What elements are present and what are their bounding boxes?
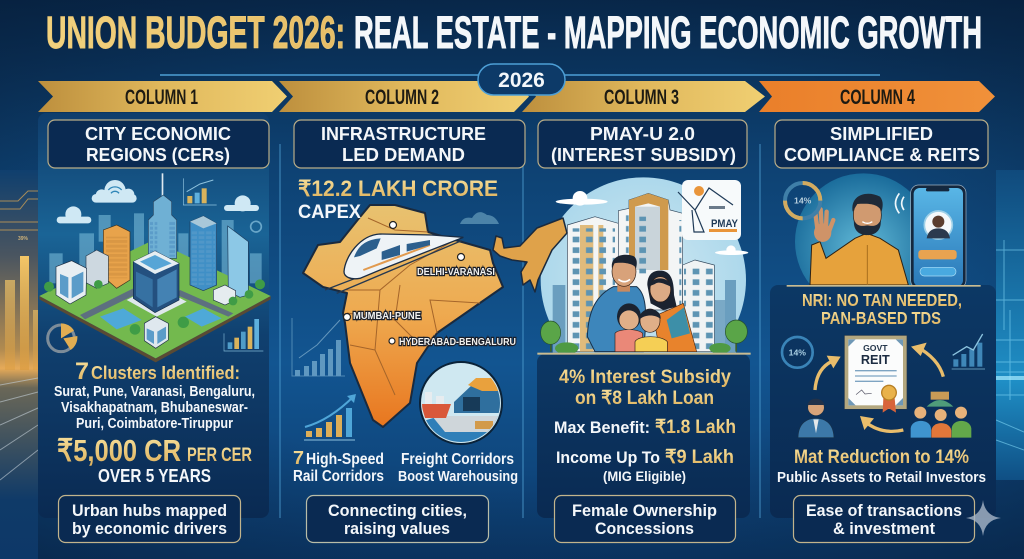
column banner 2: COLUMN 2 <box>365 86 439 109</box>
capex figure: ₹12.2 LAKH CRORE <box>298 176 498 201</box>
column banner 2 <box>279 81 529 112</box>
arrow heads <box>827 343 927 430</box>
illustration: bullet train <box>325 234 463 293</box>
corridor captions: Boost Warehousing <box>398 468 518 485</box>
heading: infrastructure led demand <box>294 120 525 168</box>
takeaway box 4: & investment <box>833 520 935 538</box>
ring 14 percent top <box>785 183 820 218</box>
center apartment <box>618 193 683 310</box>
NRI heading: NRI: NO TAN NEEDED, <box>802 290 962 310</box>
illustration: NRI man with phone <box>783 173 981 287</box>
investor <box>798 399 834 438</box>
year badge <box>478 64 565 95</box>
heading: city economic regions: REGIONS (CERs) <box>86 145 230 165</box>
REIT caption <box>777 446 986 486</box>
NRI heading: PAN-BASED TDS <box>821 308 941 328</box>
growth chart icon <box>304 394 356 440</box>
children <box>615 303 667 352</box>
icon: PMAY logo <box>678 180 741 240</box>
left apartment <box>567 217 618 352</box>
heading: city economic regions: CITY ECONOMIC <box>85 124 231 144</box>
illustration: family and housing <box>537 177 751 355</box>
REIT caption: Public Assets to Retail Investors <box>777 469 986 486</box>
subsidy details: Max Benefit: <box>554 418 650 437</box>
lower building <box>144 317 168 348</box>
takeaway box 3: Female Ownership <box>572 502 717 520</box>
takeaway box 4: Ease of transactions <box>806 502 962 520</box>
column banner 4: COLUMN 4 <box>840 86 915 109</box>
small building <box>86 250 108 288</box>
certificate <box>844 335 907 413</box>
heading: pmay-u: (INTEREST SUBSIDY) <box>551 145 736 165</box>
takeaway box 1: Urban hubs mapped <box>72 502 227 520</box>
subsidy details <box>554 367 736 484</box>
heading: infrastructure led demand: INFRASTRUCTURE <box>321 124 486 144</box>
icon: freight warehouse <box>420 362 505 445</box>
trees <box>541 320 747 354</box>
illustration: isometric city <box>39 173 271 362</box>
clusters text: Surat, Pune, Varanasi, Bengaluru, <box>54 384 255 400</box>
title <box>46 7 982 58</box>
panel: column 2 <box>292 120 525 542</box>
cloud icons <box>57 180 259 223</box>
clouds <box>556 191 748 255</box>
map labels <box>344 222 516 348</box>
heading: pmay-u <box>538 120 747 168</box>
clusters text: Visakhapatnam, Bhubaneswar- <box>61 400 248 416</box>
clusters text: Puri, Coimbatore-Tiruppur <box>76 416 233 432</box>
title: UNION BUDGET 2026: <box>46 7 345 58</box>
certificate: GOVT <box>863 343 888 353</box>
divider lines <box>280 144 760 518</box>
takeaway box 2: Connecting cities, <box>328 502 467 520</box>
map labels: DELHI-VARANASI <box>417 267 495 278</box>
column banner 1: COLUMN 1 <box>125 86 198 109</box>
right apartment <box>683 260 714 352</box>
corridor captions: Freight Corridors <box>401 451 514 468</box>
column banner 3 <box>522 81 765 112</box>
takeaway box 2: raising values <box>344 520 450 538</box>
clusters text: 7 <box>75 358 89 385</box>
retail group <box>911 392 971 438</box>
takeaway box 1 <box>58 496 240 542</box>
subsidy details: on ₹8 Lakh Loan <box>575 388 714 409</box>
subsidy details: Income Up To <box>556 448 660 467</box>
orange tower <box>103 225 130 288</box>
column banner 4 <box>759 81 995 112</box>
faded growth chart <box>292 318 345 376</box>
panel: column 4 <box>770 120 996 542</box>
white building <box>56 261 87 304</box>
man <box>810 194 908 285</box>
heading: simplified compliance <box>775 120 988 168</box>
cycle arrows <box>815 347 943 431</box>
column banner 3: COLUMN 3 <box>604 86 679 109</box>
panel: column 1 <box>38 113 271 542</box>
takeaway box 3: Concessions <box>595 520 694 538</box>
subsidy details: ₹1.8 Lakh <box>655 417 736 438</box>
panel: column 3 <box>493 120 751 542</box>
capex figure: CAPEX <box>298 202 361 223</box>
icon: PMAY logo: PMAY <box>711 218 739 230</box>
spire tower <box>148 173 177 258</box>
mother <box>647 271 697 352</box>
heading: infrastructure led demand: LED DEMAND <box>342 145 465 165</box>
corridor captions: 7 <box>293 448 304 468</box>
father <box>587 255 646 352</box>
corridor captions <box>293 448 518 485</box>
certificate: REIT <box>861 353 890 367</box>
capex figure <box>298 176 498 223</box>
bar chart icon bottom <box>224 319 263 351</box>
map: India with corridors <box>303 205 503 427</box>
ground line <box>787 285 981 287</box>
bar chart icon top <box>183 178 217 205</box>
takeaway box 4 <box>794 496 974 542</box>
funding figure <box>57 433 252 486</box>
central building <box>127 251 187 317</box>
icon: sparkle <box>966 500 1001 536</box>
ring 14 percent: 14% <box>789 348 806 358</box>
takeaway box 3 <box>554 496 736 542</box>
heading: city economic regions <box>48 120 269 168</box>
map labels: HYDERABAD-BENGALURU <box>399 337 516 348</box>
heading: pmay-u: PMAY-U 2.0 <box>590 124 695 144</box>
subsidy details: ₹9 Lakh <box>665 447 734 468</box>
ground line <box>537 353 751 355</box>
REIT diagram <box>782 334 985 438</box>
corridor captions: Rail Corridors <box>293 468 384 485</box>
heading: simplified compliance: COMPLIANCE & REITS <box>784 145 980 165</box>
clusters text <box>54 358 255 432</box>
signal arcs <box>895 193 904 213</box>
glass tower <box>228 226 248 297</box>
clusters text: Clusters Identified: <box>91 363 240 383</box>
REIT caption: Mat Reduction to 14% <box>794 446 969 468</box>
corridor captions: High-Speed <box>306 451 384 468</box>
subsidy details: (MIG Eligible) <box>603 469 686 484</box>
year badge: 2026 <box>498 69 545 92</box>
ring 14 percent top: 14% <box>794 196 812 206</box>
phone <box>911 185 966 288</box>
funding figure: OVER 5 YEARS <box>98 465 211 486</box>
blue tower <box>190 216 217 291</box>
funding figure: ₹5,000 CR <box>57 433 181 468</box>
takeaway box 1: by economic drivers <box>72 520 227 538</box>
NRI heading <box>802 290 962 328</box>
takeaway box 2 <box>306 496 488 542</box>
column banner 1 <box>38 81 287 112</box>
pie icon <box>48 323 77 352</box>
map labels: MUMBAI-PUNE <box>353 311 421 322</box>
heading: simplified compliance: SIMPLIFIED <box>830 124 933 144</box>
ring 14 percent <box>782 337 813 368</box>
map: northeast India <box>493 218 567 292</box>
growth chart <box>952 334 985 369</box>
subsidy details: 4% Interest Subsidy <box>559 367 731 388</box>
background: 39% <box>18 236 29 242</box>
funding figure: PER CER <box>187 445 252 466</box>
